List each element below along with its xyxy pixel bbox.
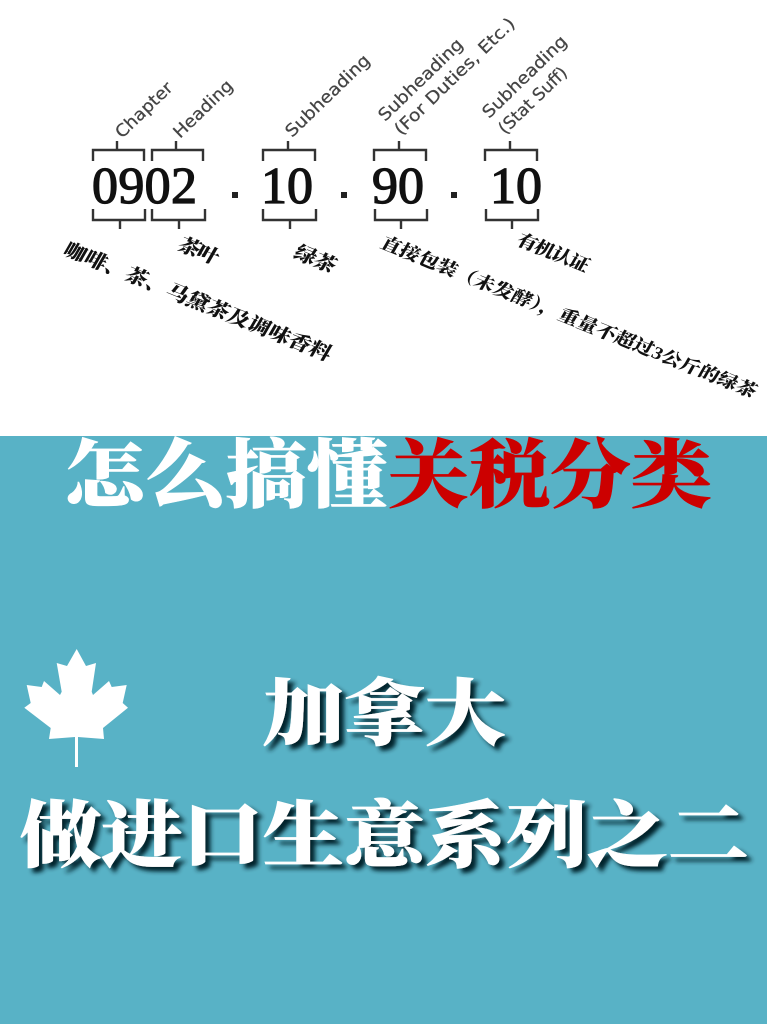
label: Subheading (Stat Suff): (Stat Suff) <box>495 63 572 139</box>
title: 怎么搞懂关税分类: 怎么搞懂关税分类 <box>64 435 712 517</box>
label: Subheading: Subheading <box>282 51 375 142</box>
code digits: 90 <box>372 158 424 215</box>
heading: 加拿大: 加拿大 <box>263 674 506 755</box>
code digits: 10 <box>261 158 313 215</box>
label: 直接包装（未发酵），重量不超过3公斤的绿茶: 直接包装（未发酵），重量不超过3公斤的绿茶 <box>377 232 761 402</box>
separator dots <box>232 192 457 198</box>
panel: teal title background <box>0 436 767 1024</box>
label: 绿茶: 绿茶 <box>290 241 341 277</box>
label: 茶叶: 茶叶 <box>174 233 224 269</box>
bottom brackets <box>93 209 538 229</box>
label: 咖啡、茶、马黛茶及调味香料: 咖啡、茶、马黛茶及调味香料 <box>60 238 336 365</box>
label: Subheading (Stat Suff): Subheading <box>479 32 572 123</box>
panel: white tariff code diagram <box>0 0 767 436</box>
code digits <box>92 158 542 215</box>
heading: 做进口生意系列之二: 做进口生意系列之二 <box>20 795 749 877</box>
label: Heading: Heading <box>170 76 237 143</box>
top brackets <box>93 141 537 161</box>
icon: maple leaf <box>24 649 128 767</box>
code digits: 10 <box>490 158 542 215</box>
label: 有机认证: 有机认证 <box>513 229 594 277</box>
label: Subheading (For Duties, Etc.): (For Duties, Etc.) <box>391 14 520 140</box>
label: Chapter: Chapter <box>112 78 177 143</box>
code digits: 0902 <box>92 158 197 215</box>
label: Subheading (For Duties, Etc.): Subheading <box>375 35 468 126</box>
